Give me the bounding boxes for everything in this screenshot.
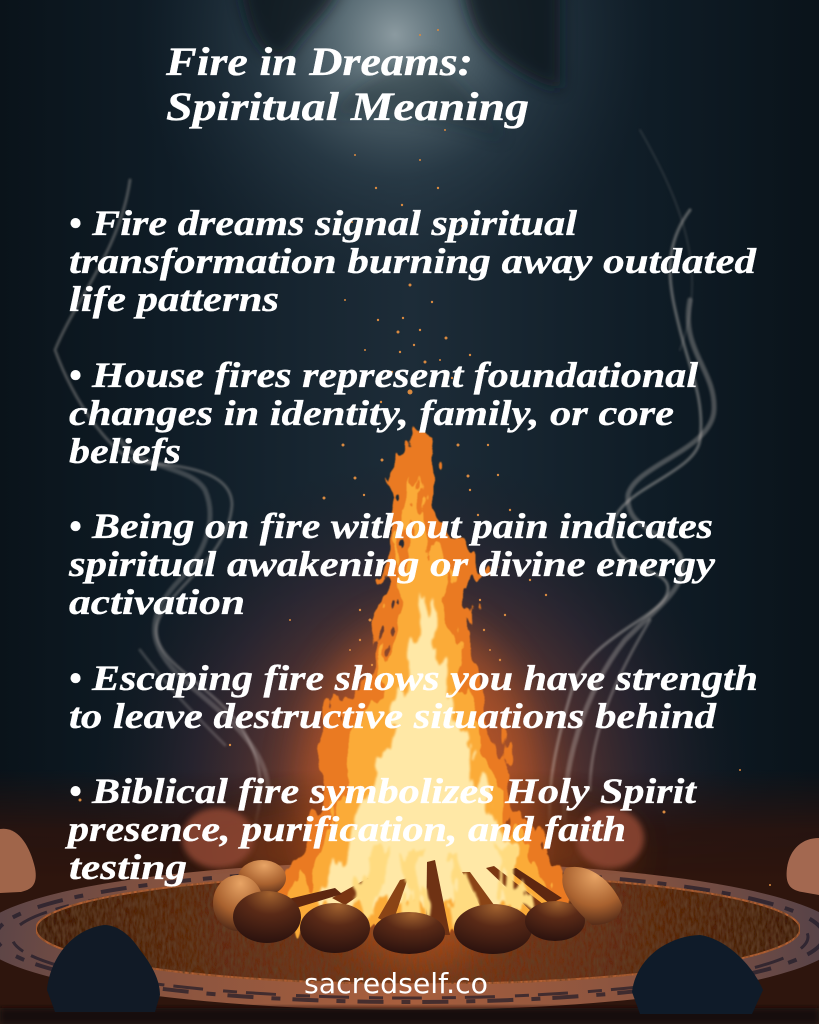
bullet 3: being on fire without pain: spiritual awakening or divine energy [68,544,716,584]
bullet 3: being on fire without pain [68,506,716,622]
ground with stone ring [0,770,819,1024]
campfire [213,432,622,960]
bullet 1: spiritual transformation [69,203,757,319]
bullet 3: being on fire without pain: activation [69,582,245,622]
title: Spiritual Meaning [166,84,529,129]
bullet 4: escaping fire: to leave destructive situations behind [69,696,717,736]
grass circle inside ring [36,874,800,984]
bullet 5: biblical fire: Biblical fire symbolizes Holy Spirit [91,771,697,811]
bullet 2: house fires: • [69,355,82,395]
bullet 1: spiritual transformation: transformation burning away outdated [69,241,757,281]
background boulders [0,808,819,895]
bullet 2: house fires: changes in identity, family, or core [69,393,674,433]
bullet 5: biblical fire [64,771,697,887]
bullet 5: biblical fire: testing [69,847,187,887]
bullet 3: being on fire without pain: Being on fire without pain indicates [91,506,713,546]
bullet 2: house fires [69,355,698,471]
fire glow [300,620,540,960]
bullet 1: spiritual transformation: • [69,203,82,243]
bullet 4: escaping fire: Escaping fire shows you have strength [91,658,758,698]
rising sparks [78,29,771,886]
bullet 3: being on fire without pain: • [69,506,82,546]
bullet 4: escaping fire: • [69,658,82,698]
bullet 1: spiritual transformation: Fire dreams signal spiritual [91,203,577,243]
title [165,39,529,129]
smoke wisps [55,130,714,860]
flame tongues over logs [355,845,528,925]
bullet 4: escaping fire [69,658,758,736]
bullet 1: spiritual transformation: life patterns [69,279,279,319]
flame core [315,590,525,905]
fire logs [284,860,562,935]
stone ring border [0,862,819,1010]
bullet 2: house fires: House fires represent foundational [91,355,698,395]
dark foreground rocks [47,925,763,1014]
bullet 5: biblical fire: presence, purification, and faith [64,809,626,849]
title: Fire in Dreams: [165,39,473,84]
mid flame [282,480,552,925]
website footer: sacredself.co [304,967,488,1000]
bullet 5: biblical fire: • [69,771,82,811]
outer flame [265,432,570,920]
bullet 2: house fires: beliefs [69,431,181,471]
base stones [213,860,622,954]
